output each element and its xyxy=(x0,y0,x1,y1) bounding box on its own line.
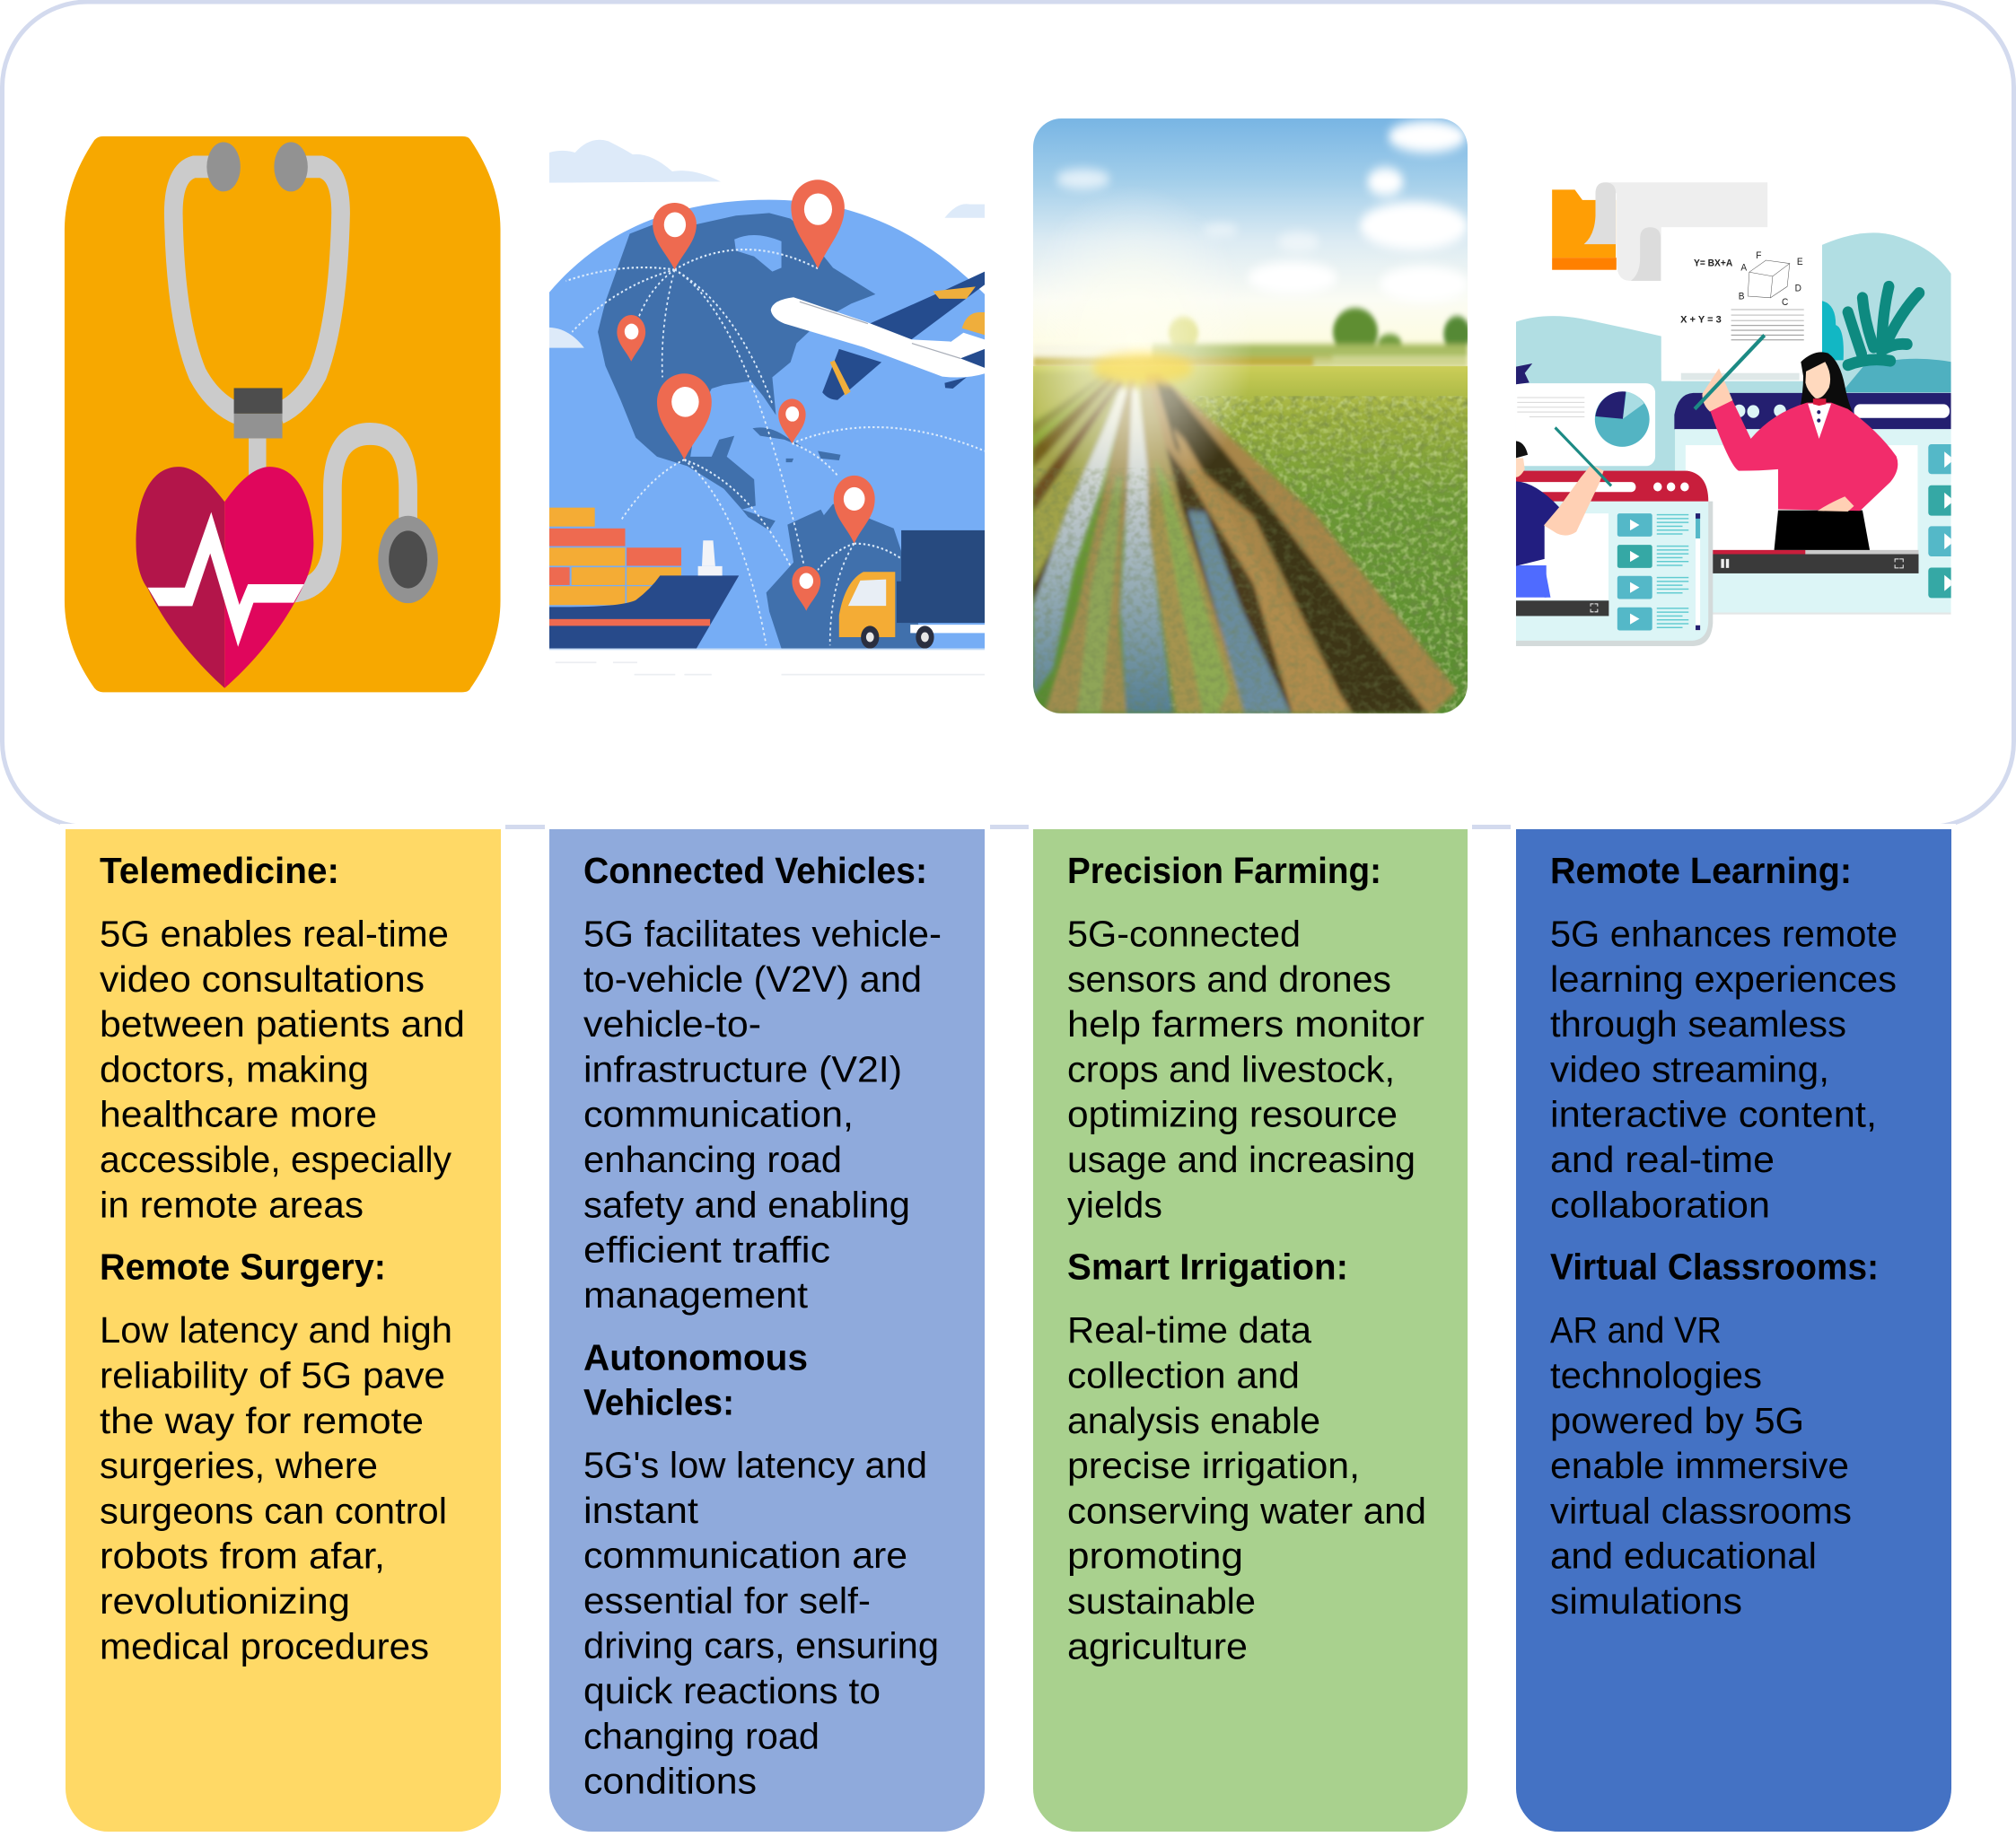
text: connected vehicles description: efficient traffic xyxy=(583,1229,830,1271)
text: smart irrigation description: analysis enable xyxy=(1067,1400,1320,1441)
math notes: D xyxy=(1795,284,1801,294)
text: autonomous vehicles description: instant xyxy=(583,1490,699,1531)
text: smart irrigation description: sustainable xyxy=(1067,1580,1256,1622)
text: remote learning description: learning experiences xyxy=(1550,958,1897,1000)
icon: stethoscope xyxy=(173,142,438,603)
text: remote surgery description: robots from afar, xyxy=(100,1535,385,1577)
text: smart irrigation description xyxy=(1067,1309,1426,1666)
sun glare xyxy=(1033,205,1248,495)
text: precision farming description: yields xyxy=(1067,1184,1162,1225)
text: remote surgery description: reliability of 5G pave xyxy=(100,1355,445,1396)
text: precision farming description: crops and livestock, xyxy=(1067,1048,1395,1089)
text: autonomous vehicles description: essential for self- xyxy=(583,1579,871,1621)
text: autonomous vehicles description: 5G's low latency and xyxy=(583,1445,927,1486)
delivery truck xyxy=(839,530,985,649)
text: connected vehicles description: safety and enabling xyxy=(583,1184,910,1225)
text: remote surgery description xyxy=(100,1309,452,1666)
text: remote learning description xyxy=(1550,914,1898,1225)
text: remote surgery description: Low latency and high xyxy=(100,1309,452,1351)
leaf texture xyxy=(1198,396,1468,711)
text: remote learning description: through seamless xyxy=(1550,1003,1846,1045)
text: precision farming description: optimizing resource xyxy=(1067,1094,1398,1135)
airplane xyxy=(771,272,985,400)
card: agriculture xyxy=(1033,829,1468,1832)
icon: heart with pulse xyxy=(136,467,313,688)
text: remote surgery description: revolutionizing xyxy=(100,1580,350,1622)
math notes: F xyxy=(1756,251,1762,261)
text: connected vehicles description: enhancing road xyxy=(583,1139,842,1180)
small video window xyxy=(1516,471,1713,646)
text: telemedicine description: video consultations xyxy=(100,958,425,1000)
tree line xyxy=(1033,308,1470,367)
North and Central America xyxy=(598,213,875,530)
text: smart irrigation description: promoting xyxy=(1067,1535,1243,1577)
teacher figure xyxy=(1695,336,1898,550)
heading: Autonomous Vehicles: Autonomous xyxy=(583,1337,808,1378)
heading: Virtual Classrooms: Virtual Classrooms: xyxy=(1550,1246,1879,1287)
text: smart irrigation description: collection and xyxy=(1067,1355,1300,1396)
field base xyxy=(1033,366,1468,713)
orange folder xyxy=(1552,189,1617,270)
South America xyxy=(767,503,924,649)
card: healthcare xyxy=(66,829,501,1832)
text: telemedicine description: 5G enables real-time xyxy=(100,914,449,955)
heading: Precision Farming: Precision Farming: xyxy=(1067,850,1381,891)
math notes: X + Y = 3 xyxy=(1680,314,1722,325)
math notes xyxy=(1680,251,1804,340)
cargo ship xyxy=(549,508,739,649)
text: autonomous vehicles description: communication are xyxy=(583,1535,907,1576)
text: virtual classrooms description: AR and VR xyxy=(1550,1309,1722,1351)
plant leaves xyxy=(1822,286,1951,392)
text: virtual classrooms description: technologies xyxy=(1550,1355,1762,1396)
chart card xyxy=(1508,363,1655,466)
text: remote surgery description: surgeons can control xyxy=(100,1490,447,1531)
text: connected vehicles description: vehicle-to- xyxy=(583,1003,761,1045)
text: connected vehicles description: communication, xyxy=(583,1094,854,1135)
text: remote surgery description: medical procedures xyxy=(100,1625,429,1666)
math notes: A xyxy=(1740,263,1747,274)
soil texture xyxy=(1033,468,1468,713)
text: autonomous vehicles description: quick reactions to xyxy=(583,1670,881,1711)
text: telemedicine description xyxy=(100,914,465,1225)
text: virtual classrooms description: enable immersive xyxy=(1550,1445,1849,1486)
text: remote surgery description: the way for remote xyxy=(100,1400,424,1441)
heading: Telemedicine: Telemedicine: xyxy=(100,850,339,891)
text: remote learning description: collaboration xyxy=(1550,1184,1770,1225)
math notes: C xyxy=(1782,298,1789,308)
teal background hills xyxy=(1516,316,1951,482)
sky xyxy=(1033,118,1468,367)
text: virtual classrooms description: and educational xyxy=(1550,1535,1817,1577)
math notes: Y= BX+A xyxy=(1694,258,1733,269)
ground xyxy=(549,649,985,650)
text: remote learning description: interactive content, xyxy=(1550,1094,1877,1135)
heading: Autonomous Vehicles xyxy=(583,1337,808,1423)
text: remote learning description: video streaming, xyxy=(1550,1048,1829,1089)
paper scroll xyxy=(1584,182,1822,381)
text: autonomous vehicles description xyxy=(583,1445,939,1802)
text: virtual classrooms description: virtual classrooms xyxy=(1550,1490,1852,1531)
text: precision farming description: sensors and drones xyxy=(1067,958,1391,1000)
clouds xyxy=(1056,120,1469,302)
clouds xyxy=(549,140,985,218)
text: connected vehicles description: to-vehicle (V2V) and xyxy=(583,958,922,1000)
text: connected vehicles description xyxy=(583,914,942,1316)
globe xyxy=(549,200,985,649)
text: telemedicine description: accessible, especially xyxy=(100,1139,451,1180)
text: remote learning description: and real-time xyxy=(1550,1139,1775,1180)
text: autonomous vehicles description: changing road xyxy=(583,1715,820,1756)
heading: Smart Irrigation: Smart Irrigation: xyxy=(1067,1246,1348,1287)
text: virtual classrooms description xyxy=(1550,1309,1852,1622)
icon background: orange rounded shape xyxy=(65,136,501,692)
text: connected vehicles description: infrastructure (V2I) xyxy=(583,1048,902,1089)
card: transportation xyxy=(549,829,985,1832)
heading: Remote Surgery: Remote Surgery: xyxy=(100,1246,386,1287)
image: stethoscope and heart xyxy=(65,136,501,692)
text: virtual classrooms description: simulations xyxy=(1550,1580,1742,1622)
heading: Remote Learning: Remote Learning: xyxy=(1550,850,1852,891)
text: remote learning description: 5G enhances remote xyxy=(1550,914,1898,955)
text: smart irrigation description: agriculture xyxy=(1067,1625,1248,1666)
math notes: B xyxy=(1739,292,1745,302)
panel: rounded image frame xyxy=(2,2,2014,827)
soil furrows and water channels xyxy=(1033,372,1457,713)
text: precision farming description: usage and increasing xyxy=(1067,1139,1416,1180)
text: precision farming description: 5G-connected xyxy=(1067,914,1301,955)
card: education xyxy=(1516,829,1951,1832)
main video window xyxy=(1674,393,1956,615)
text: telemedicine description: doctors, making xyxy=(100,1048,369,1089)
image: remote learning illustration xyxy=(1508,182,1956,646)
math notes: E xyxy=(1797,258,1803,267)
text: connected vehicles description: management xyxy=(583,1274,809,1316)
text: smart irrigation description: conserving water and xyxy=(1067,1490,1426,1531)
location pins xyxy=(617,179,875,611)
text: remote surgery description: surgeries, where xyxy=(100,1445,378,1486)
heading: Connected Vehicles: Connected Vehicles: xyxy=(583,850,927,891)
text: connected vehicles description: 5G facilitates vehicle- xyxy=(583,914,942,955)
image: irrigated farm field photo xyxy=(1014,118,1470,713)
text: virtual classrooms description: powered by 5G xyxy=(1550,1400,1804,1441)
text: telemedicine description: healthcare more xyxy=(100,1094,377,1135)
dashed routes xyxy=(566,249,985,645)
text: autonomous vehicles description: conditions xyxy=(583,1761,757,1802)
image: global logistics map xyxy=(549,140,985,676)
text: autonomous vehicles description: driving cars, ensuring xyxy=(583,1625,939,1666)
text: smart irrigation description: Real-time data xyxy=(1067,1309,1311,1351)
text: telemedicine description: between patients and xyxy=(100,1003,465,1045)
text: precision farming description xyxy=(1067,914,1424,1225)
text: telemedicine description: in remote areas xyxy=(100,1184,364,1225)
text: smart irrigation description: precise irrigation, xyxy=(1067,1445,1360,1486)
heading: Autonomous Vehicles: Vehicles: xyxy=(583,1382,734,1423)
text: precision farming description: help farmers monitor xyxy=(1067,1003,1424,1045)
student figure xyxy=(1516,427,1611,598)
